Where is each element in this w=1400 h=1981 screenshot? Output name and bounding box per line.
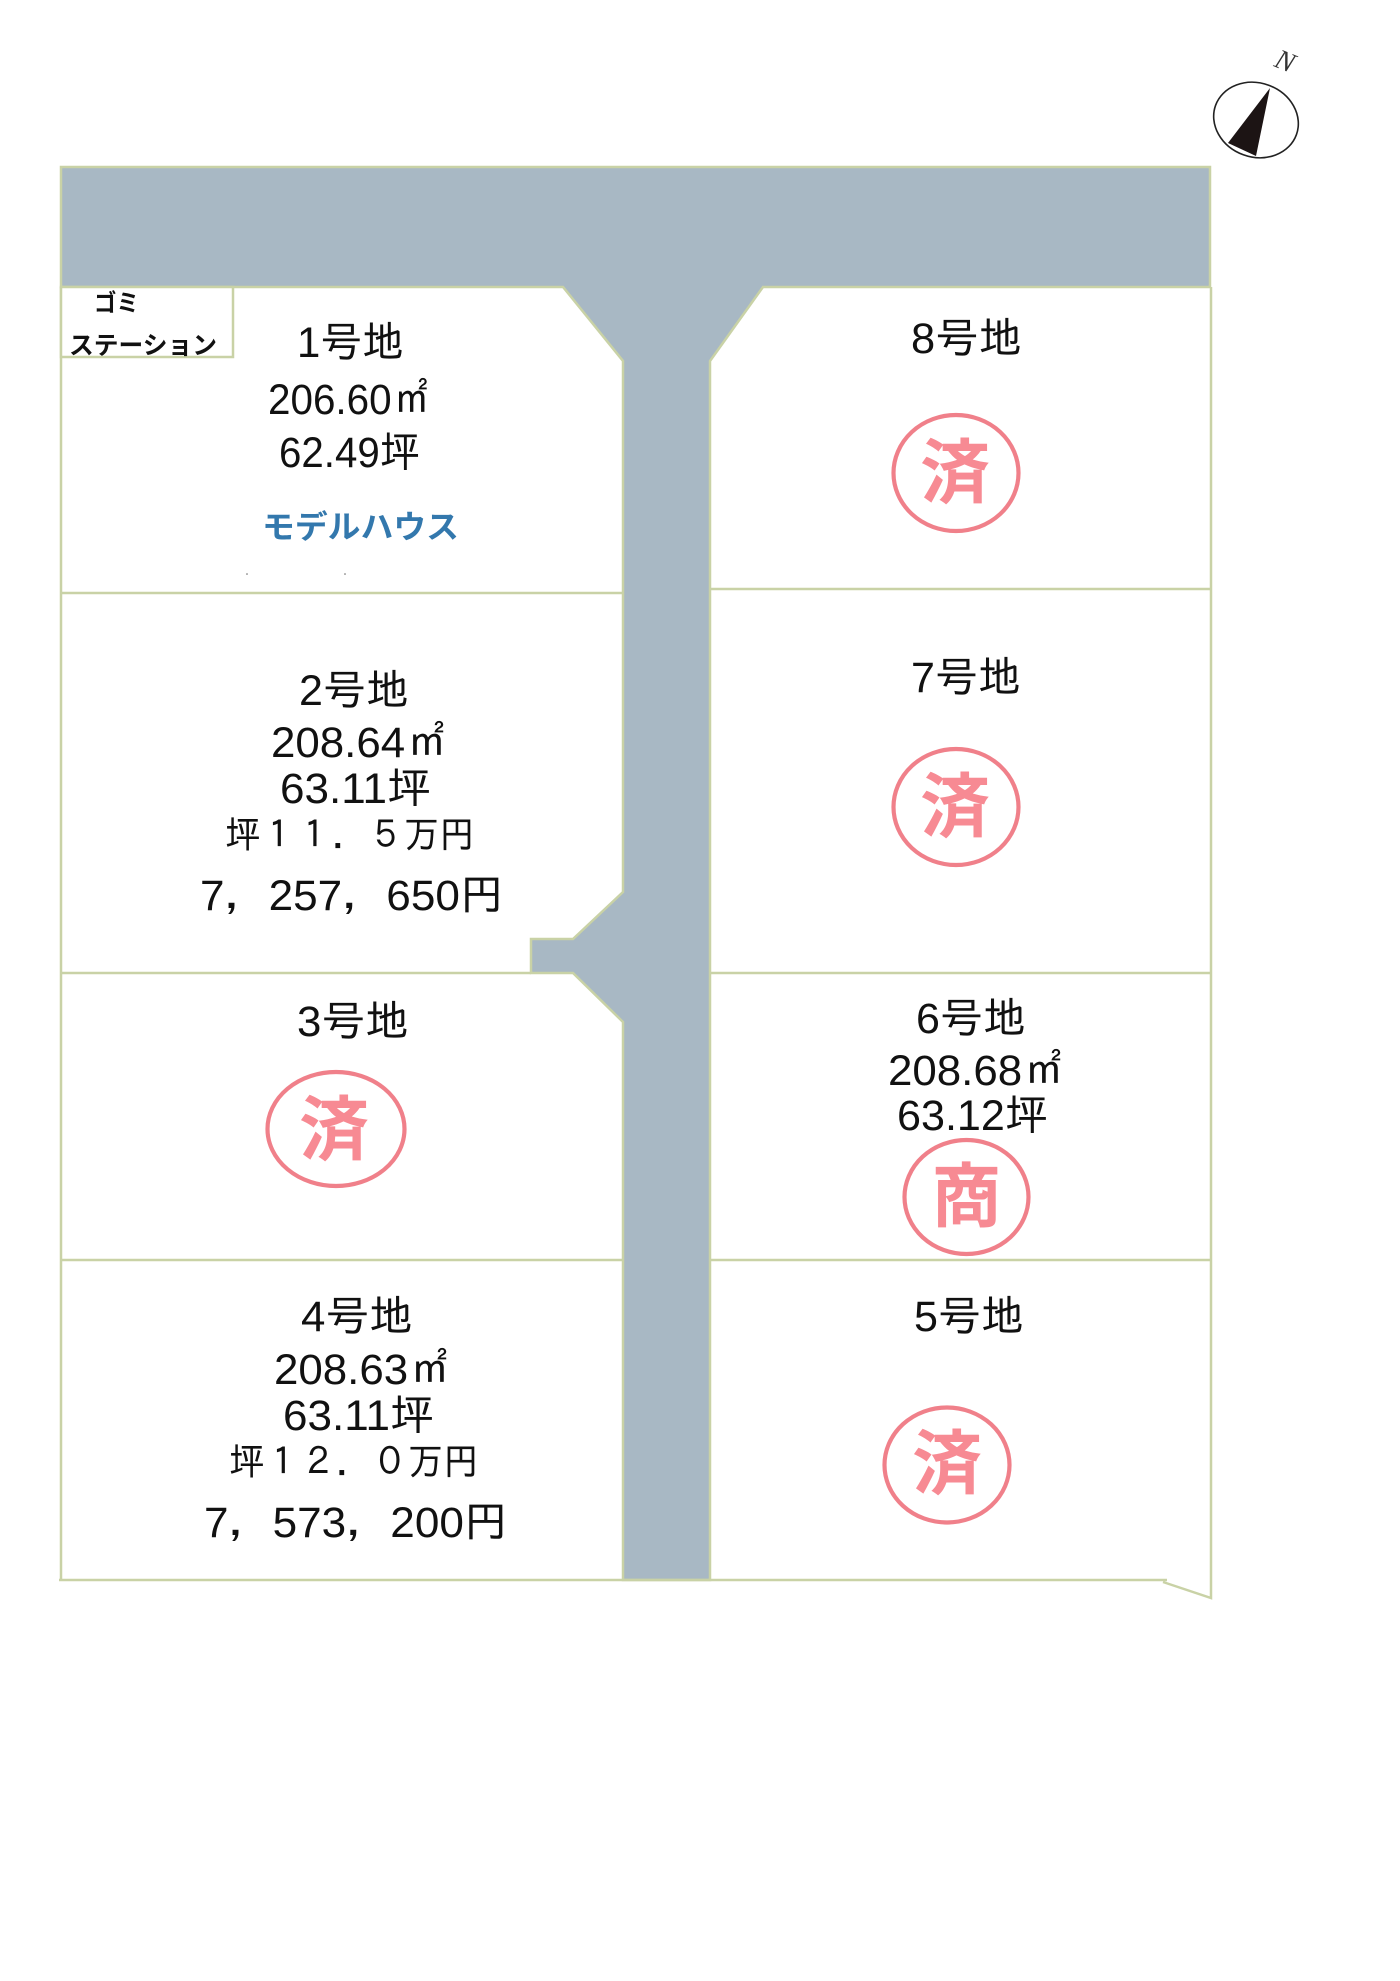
panel: lot 5 — [884, 1293, 1024, 1522]
panel: lot 1: 62.49坪 — [279, 429, 420, 477]
panel: garbage station: ステーション — [69, 332, 217, 360]
panel: lot 2: 坪１１．５万円 — [225, 815, 475, 857]
panel: lot 6: 商 — [932, 1158, 1002, 1236]
panel: lot 8: 8号地 — [911, 315, 1022, 363]
panel: lot 3: 済 — [299, 1091, 369, 1169]
panel: lot 6: 208.68㎡ — [888, 1047, 1066, 1095]
panel: lot 2: 2号地 — [299, 667, 409, 715]
panel: lot 7 — [894, 654, 1021, 865]
panel: lot 4: 坪１２．０万円 — [229, 1442, 479, 1484]
panel: lot 6: 6号地 — [916, 995, 1026, 1043]
panel: lot 1: 206.60㎡ — [268, 376, 432, 424]
panel: lot 4: 208.63㎡ — [274, 1346, 452, 1394]
panel: lot 2: 208.64㎡ — [271, 719, 449, 767]
road — [61, 167, 1210, 1580]
lot boundary lines — [59, 287, 1211, 1598]
panel: lot 6 — [888, 995, 1066, 1254]
panel: lot 2: 63.11坪 — [280, 765, 431, 813]
panel: lot 8: 済 — [920, 434, 990, 512]
panel: lot 4: 63.11坪 — [283, 1392, 434, 1440]
icon: north compass: N — [1269, 43, 1301, 80]
panel: lot 1: モデルハウス — [262, 509, 459, 545]
panel: lot 4: 4号地 — [301, 1293, 413, 1341]
panel: lot 8 — [894, 315, 1022, 531]
panel: garbage station: ゴミ — [94, 289, 139, 317]
panel: lot 6: 63.12坪 — [897, 1092, 1048, 1140]
panel: lot 3: 3号地 — [297, 998, 409, 1046]
panel: lot 7: 済 — [920, 768, 990, 846]
panel: lot 1: 1号地 — [297, 319, 404, 367]
panel: lot 7: 7号地 — [911, 654, 1021, 702]
panel: lot 4: 7，573，200円 — [204, 1499, 508, 1547]
panel: lot 5: 5号地 — [914, 1293, 1024, 1341]
panel: lot 2: 7，257，650円 — [200, 872, 504, 920]
panel: lot 1 — [246, 319, 459, 575]
panel: lot 4 — [204, 1293, 508, 1547]
panel: garbage station — [61, 287, 233, 360]
panel: lot 3 — [268, 998, 409, 1186]
panel: lot 5: 済 — [912, 1425, 982, 1503]
panel: lot 2 — [200, 667, 504, 920]
icon: north compass — [1203, 43, 1309, 169]
